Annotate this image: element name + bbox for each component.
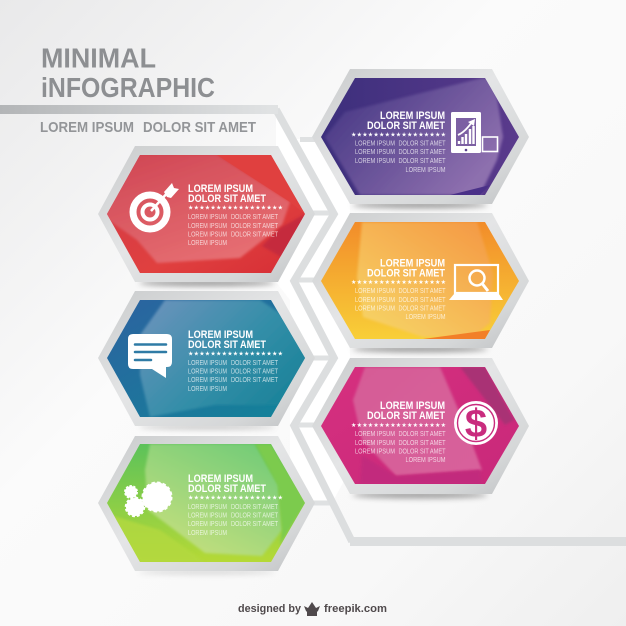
green text: LOREM IPSUM — [188, 473, 253, 485]
green text: LOREM IPSUM — [188, 530, 227, 537]
footer credit: freepik.com — [324, 603, 387, 615]
orange text: LOREM IPSUM — [406, 314, 446, 321]
green text: LOREM IPSUM — [188, 521, 227, 528]
icon: target — [133, 183, 179, 229]
icon: tablet with chart — [451, 112, 498, 153]
red text — [188, 183, 283, 247]
red text: LOREM IPSUM — [188, 223, 227, 230]
magenta text: LOREM IPSUM — [355, 440, 395, 447]
blue text: DOLOR SIT AMET — [231, 377, 279, 384]
purple text: DOLOR SIT AMET — [398, 158, 446, 165]
orange text: DOLOR SIT AMET — [367, 268, 445, 280]
icon: gears — [125, 483, 171, 516]
red text: DOLOR SIT AMET — [231, 223, 279, 230]
orange text: ★★★★★★★★★★★★★★★★★ — [351, 279, 446, 286]
green text: DOLOR SIT AMET — [231, 512, 279, 520]
red text: DOLOR SIT AMET — [188, 193, 266, 205]
panel: purple hexagon — [312, 69, 529, 208]
blue text: DOLOR SIT AMET — [188, 339, 266, 351]
orange text: DOLOR SIT AMET — [398, 288, 446, 295]
magenta text: LOREM IPSUM — [380, 400, 445, 412]
orange text: LOREM IPSUM — [355, 306, 395, 312]
subtitle: LOREM IPSUM — [40, 119, 134, 136]
orange text: LOREM IPSUM — [380, 258, 445, 270]
purple text: DOLOR SIT AMET — [398, 140, 446, 148]
icon: speech bubble — [128, 334, 172, 378]
magenta text: DOLOR SIT AMET — [367, 410, 445, 422]
purple text — [351, 110, 446, 174]
orange text: LOREM IPSUM — [355, 297, 395, 304]
title: MINIMAL — [41, 42, 156, 74]
title — [41, 42, 215, 103]
orange text — [351, 258, 446, 321]
magenta text: LOREM IPSUM — [355, 448, 395, 456]
panel: red hexagon — [98, 146, 315, 286]
panel: magenta hexagon — [312, 358, 529, 498]
icon: dollar coin — [454, 401, 498, 446]
blue text: LOREM IPSUM — [188, 377, 227, 384]
green text: DOLOR SIT AMET — [188, 483, 266, 495]
blue text: DOLOR SIT AMET — [231, 360, 279, 367]
footer credit: designed by — [238, 603, 302, 615]
purple text: LOREM IPSUM — [355, 149, 395, 156]
magenta text: DOLOR SIT AMET — [398, 440, 446, 447]
purple text: LOREM IPSUM — [380, 110, 445, 122]
purple text: DOLOR SIT AMET — [367, 120, 445, 132]
green text: DOLOR SIT AMET — [231, 521, 279, 528]
red text: LOREM IPSUM — [188, 240, 227, 247]
magenta text: DOLOR SIT AMET — [398, 448, 446, 456]
blue text — [188, 329, 283, 393]
green text: LOREM IPSUM — [188, 512, 227, 520]
green text: DOLOR SIT AMET — [231, 504, 279, 511]
red text: LOREM IPSUM — [188, 183, 253, 195]
green text: ★★★★★★★★★★★★★★★★★ — [188, 494, 283, 502]
blue text: LOREM IPSUM — [188, 329, 253, 341]
title: iNFOGRAPHIC — [41, 72, 215, 103]
subtitle — [40, 119, 256, 136]
connector line — [0, 110, 626, 542]
green text: LOREM IPSUM — [188, 504, 227, 511]
icon: crown — [304, 602, 320, 616]
orange text: DOLOR SIT AMET — [398, 306, 446, 312]
footer credit — [238, 602, 387, 616]
purple text: LOREM IPSUM — [355, 140, 395, 148]
purple text: LOREM IPSUM — [355, 158, 395, 165]
purple text: LOREM IPSUM — [406, 167, 446, 174]
blue text: LOREM IPSUM — [188, 386, 227, 393]
magenta text: DOLOR SIT AMET — [398, 431, 446, 438]
purple text: ★★★★★★★★★★★★★★★★★ — [351, 132, 446, 138]
icon: dollar coin: $ — [465, 402, 487, 446]
icon: laptop with magnifier — [449, 265, 503, 300]
blue text: LOREM IPSUM — [188, 360, 227, 367]
magenta text — [351, 400, 446, 464]
magenta text: ★★★★★★★★★★★★★★★★★ — [351, 422, 446, 429]
orange text: DOLOR SIT AMET — [398, 297, 446, 304]
panel: blue hexagon — [98, 291, 315, 430]
magenta text: LOREM IPSUM — [355, 431, 395, 438]
red text: DOLOR SIT AMET — [231, 232, 279, 238]
green text — [188, 473, 283, 537]
purple text: DOLOR SIT AMET — [398, 149, 446, 156]
subtitle: DOLOR SIT AMET — [143, 119, 256, 136]
magenta text: LOREM IPSUM — [406, 457, 446, 464]
panel: orange hexagon — [312, 213, 529, 352]
red text: DOLOR SIT AMET — [231, 214, 279, 221]
red text: LOREM IPSUM — [188, 232, 227, 238]
orange text: LOREM IPSUM — [355, 288, 395, 295]
red text: ★★★★★★★★★★★★★★★★★ — [188, 204, 283, 212]
panel: green hexagon — [98, 436, 315, 574]
red text: LOREM IPSUM — [188, 214, 227, 221]
blue text: LOREM IPSUM — [188, 368, 227, 376]
blue text: DOLOR SIT AMET — [231, 368, 279, 376]
blue text: ★★★★★★★★★★★★★★★★★ — [188, 350, 283, 358]
